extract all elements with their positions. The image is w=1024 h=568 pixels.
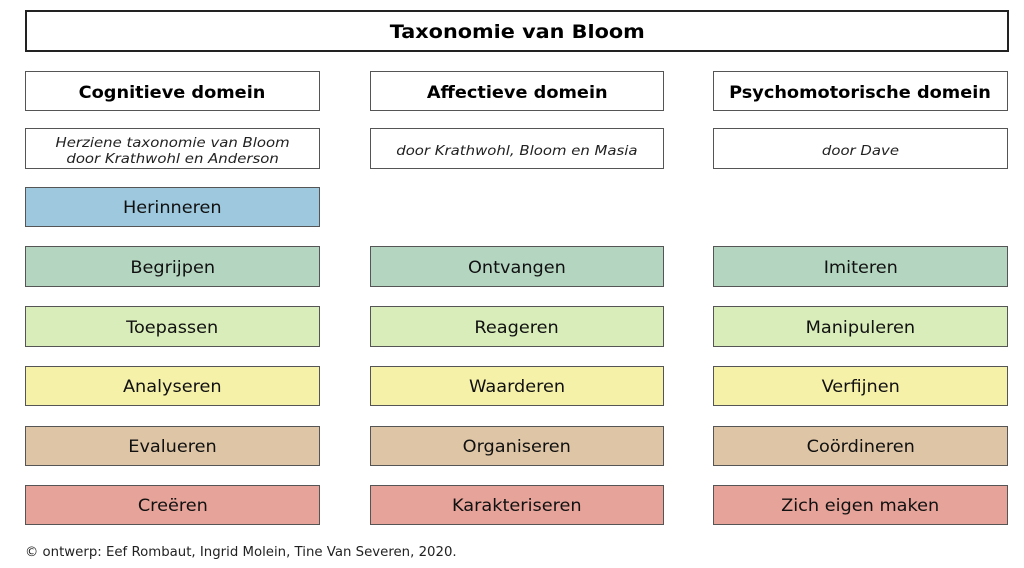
level: Verfijnen <box>713 366 1008 406</box>
title: Taxonomie van Bloom <box>389 22 645 42</box>
level: Manipuleren: Manipuleren <box>806 318 915 336</box>
level: Ontvangen <box>370 246 664 287</box>
level: Imiteren: Imiteren <box>823 258 898 276</box>
level: Waarderen: Waarderen <box>469 377 565 396</box>
level: Manipuleren <box>713 306 1008 347</box>
level: Imiteren <box>713 246 1008 287</box>
level: Verfijnen: Verfijnen <box>821 377 900 396</box>
subtitle: psychomotor source: door Dave <box>822 142 899 158</box>
level: Herinneren: Herinneren <box>123 198 222 217</box>
subtitle: psychomotor source <box>713 128 1008 169</box>
heading: psychomotor domain: Psychomotorische domein <box>730 82 991 102</box>
level: Zich eigen maken: Zich eigen maken <box>781 496 940 515</box>
level: Evalueren: Evalueren <box>128 437 217 456</box>
level: Ontvangen: Ontvangen <box>468 258 566 276</box>
level: Toepassen: Toepassen <box>126 318 219 336</box>
level: Analyseren <box>25 366 320 406</box>
heading: affective domain: Affectieve domein <box>427 82 607 102</box>
subtitle: cognitive source: Herziene taxonomie van Bloom <box>55 134 290 150</box>
heading: psychomotor domain <box>713 71 1008 111</box>
subtitle: affective source: door Krathwohl, Bloom en Masia <box>396 142 638 158</box>
level: Toepassen <box>25 306 320 347</box>
level: Creëren: Creëren <box>138 496 207 515</box>
level: Reageren: Reageren <box>475 318 559 336</box>
level: Coördineren: Coördineren <box>806 437 915 456</box>
level: Begrijpen <box>25 246 320 287</box>
subtitle: cognitive source: door Krathwohl en Anderson <box>66 150 279 166</box>
subtitle: cognitive source <box>25 128 320 169</box>
level: Reageren <box>370 306 664 347</box>
level: Creëren <box>25 485 320 525</box>
level: Evalueren <box>25 426 320 466</box>
level: Organiseren: Organiseren <box>463 437 571 456</box>
level: Analyseren: Analyseren <box>123 377 222 396</box>
subtitle: affective source <box>370 128 664 169</box>
credit line: © ontwerp: Eef Rombaut, Ingrid Molein, Tine Van Severen, 2020. <box>25 545 457 560</box>
level: Herinneren <box>25 187 320 227</box>
level: Zich eigen maken <box>713 485 1008 525</box>
heading: affective domain <box>370 71 664 111</box>
title <box>25 10 1009 52</box>
level: Coördineren <box>713 426 1008 466</box>
heading: cognitive domain: Cognitieve domein <box>79 82 266 102</box>
level: Begrijpen: Begrijpen <box>130 258 215 276</box>
level: Waarderen <box>370 366 664 406</box>
level: Organiseren <box>370 426 664 466</box>
level: Karakteriseren: Karakteriseren <box>452 496 582 515</box>
heading: cognitive domain <box>25 71 320 111</box>
level: Karakteriseren <box>370 485 664 525</box>
